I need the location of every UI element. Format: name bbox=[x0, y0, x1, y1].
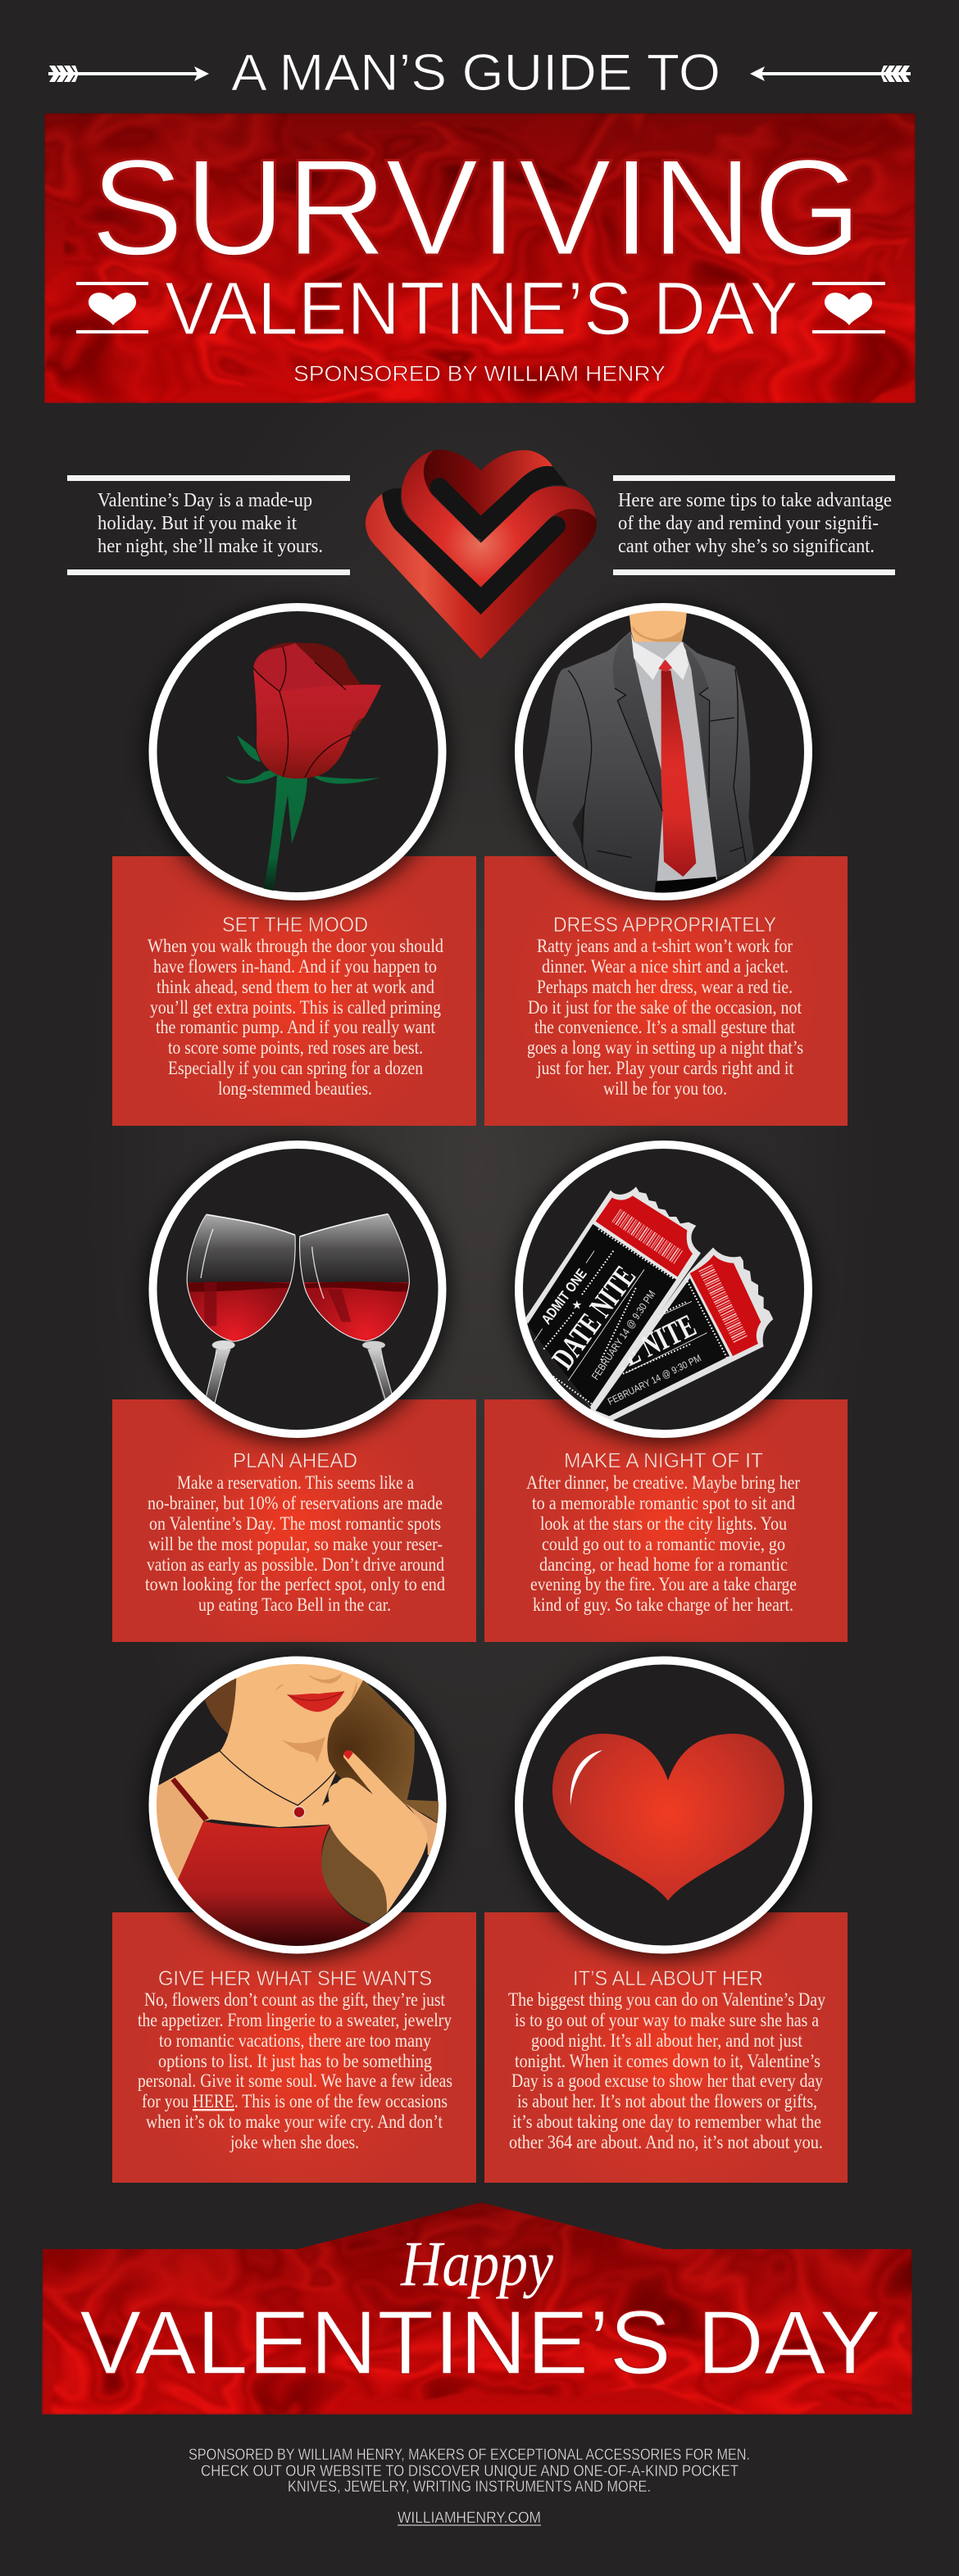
body text: make a night of it: dancing, or head home for a romantic bbox=[539, 1554, 788, 1576]
circle icon: wine glasses bbox=[147, 1141, 448, 1443]
body text: give her what she wants bbox=[138, 1989, 452, 2153]
body text: plan ahead: town looking for the perfect spot, only to end bbox=[145, 1574, 445, 1595]
body text: set the mood: to score some points, red roses are best. bbox=[168, 1037, 423, 1059]
body text: give her what she wants: options to list. It just has to be something bbox=[158, 2051, 432, 2072]
top banner bbox=[44, 113, 916, 403]
intro text: left: her night, she’ll make it yours. bbox=[98, 536, 323, 557]
body text: dress appropriately: Perhaps match her dress, wear a red tie. bbox=[537, 977, 793, 998]
ticket: front: ★ bbox=[571, 1299, 582, 1312]
body text: set the mood: When you walk through the door you should bbox=[148, 936, 443, 957]
body text: dress appropriately: Do it just for the sake of the occasion, not bbox=[528, 997, 802, 1018]
body text: give her what she wants: for you HERE. This is one of the few occasions bbox=[142, 2091, 448, 2112]
arrow: right bbox=[750, 66, 911, 82]
ticket: back bbox=[575, 1248, 773, 1422]
title: a man's guide to: A MAN’S GUIDE TO bbox=[231, 44, 720, 102]
footer text: KNIVES, JEWELRY, WRITING INSTRUMENTS AND MORE. bbox=[288, 2478, 651, 2496]
body text: dress appropriately: just for her. Play your cards right and it bbox=[536, 1058, 793, 1079]
intro text: left: Valentine’s Day is a made-up bbox=[98, 490, 312, 511]
row 3 panel: it's all about her bbox=[484, 1912, 848, 2183]
intro text: right: of the day and remind your signifi- bbox=[618, 513, 879, 534]
ticket: front bbox=[525, 1186, 701, 1411]
body text: it's all about her: is about her. It’s not about the flowers or gifts, bbox=[517, 2091, 817, 2112]
body text: make a night of it: could go out to a romantic movie, go bbox=[542, 1534, 785, 1555]
body text: dress appropriately: the convenience. It’s a small gesture that bbox=[534, 1017, 795, 1038]
heading: make a night of it: MAKE A NIGHT OF IT bbox=[564, 1449, 763, 1472]
ticket: front: FEBRUARY 14 @ 9:30 PM bbox=[589, 1288, 658, 1382]
body text: it's all about her: is to go out of your way to make sure she has a bbox=[515, 2010, 819, 2031]
footer text bbox=[189, 2447, 750, 2496]
ticket: back: FEBRUARY 14 @ 9:30 PM bbox=[606, 1352, 703, 1408]
body text: dress appropriately: Ratty jeans and a t-shirt won’t work for bbox=[537, 936, 793, 957]
row 1 panel: set the mood bbox=[112, 856, 476, 1126]
body text: it's all about her: good night. It’s all about her, and not just bbox=[531, 2030, 802, 2052]
body text: give her what she wants: joke when she does. bbox=[230, 2132, 359, 2153]
body text: set the mood: you’ll get extra points. This is called priming bbox=[150, 997, 441, 1018]
row 3 panel: give her what she wants bbox=[112, 1912, 476, 2183]
intro text: right: Here are some tips to take advantage bbox=[618, 490, 892, 511]
ticket: front: DATE NITE bbox=[546, 1260, 643, 1376]
body text: it's all about her: Day is a good excuse to show her that every day bbox=[511, 2070, 823, 2092]
body text: set the mood: long-stemmed beauties. bbox=[218, 1078, 372, 1100]
body text: plan ahead bbox=[145, 1472, 445, 1616]
row 1 panel: dress appropriately bbox=[484, 856, 848, 1126]
body text: plan ahead: on Valentine’s Day. The most romantic spots bbox=[149, 1513, 441, 1535]
body text: plan ahead: vation as early as possible. Don’t drive around bbox=[147, 1554, 444, 1576]
body text: set the mood bbox=[148, 936, 443, 1100]
body text: it's all about her: tonight. When it comes down to it, Valentine’s bbox=[515, 2051, 820, 2072]
body text: give her what she wants: to romantic vacations, there are too many bbox=[159, 2030, 431, 2052]
circle icon: man in suit bbox=[513, 604, 815, 905]
body text: set the mood: think ahead, send them to her at work and bbox=[157, 977, 434, 998]
row 2 panel: make a night of it bbox=[484, 1399, 848, 1642]
body text: it's all about her: it’s about taking one day to remember what the bbox=[512, 2111, 821, 2133]
ticket: front: ADMIT ONE bbox=[538, 1266, 590, 1327]
heading: dress appropriately: DRESS APPROPRIATELY bbox=[553, 914, 776, 937]
bottom banner bbox=[42, 2202, 912, 2415]
body text: set the mood: Especially if you can spring for a dozen bbox=[168, 1058, 423, 1079]
row 2 panel: plan ahead bbox=[112, 1399, 476, 1642]
body text: it's all about her: The biggest thing you can do on Valentine’s Day bbox=[508, 1989, 825, 2011]
body text: set the mood: the romantic pump. And if you really want bbox=[156, 1017, 435, 1038]
footer text: CHECK OUT OUR WEBSITE TO DISCOVER UNIQUE AND ONE-OF-A-KIND POCKET bbox=[201, 2463, 739, 2480]
body text: give her what she wants: the appetizer. From lingerie to a sweater, jewelry bbox=[138, 2010, 452, 2031]
body text: make a night of it: After dinner, be creative. Maybe bring her bbox=[526, 1472, 800, 1494]
heading: set the mood: SET THE MOOD bbox=[222, 914, 368, 937]
body text: give her what she wants: No, flowers don’t count as the gift, they’re just bbox=[144, 1989, 445, 2011]
ticket: back: DATE NITE bbox=[575, 1307, 702, 1394]
body text: plan ahead: no-brainer, but 10% of reservations are made bbox=[148, 1493, 443, 1514]
body text: dress appropriately: dinner. Wear a nice shirt and a jacket. bbox=[542, 956, 789, 977]
circle icon: woman with necklace bbox=[147, 1658, 448, 1959]
heading: valentine's day: VALENTINE’S DAY bbox=[165, 267, 798, 351]
icon: woven ribbon heart bbox=[366, 450, 597, 659]
heart ornament: left bbox=[76, 282, 148, 333]
body text: plan ahead: up eating Taco Bell in the car. bbox=[198, 1594, 391, 1616]
body text: give her what she wants: when it’s ok to make your wife cry. And don’t bbox=[146, 2111, 443, 2133]
intro text: right bbox=[613, 475, 895, 575]
intro text: left bbox=[67, 475, 350, 575]
body text: dress appropriately bbox=[527, 936, 803, 1100]
intro text: left: holiday. But if you make it bbox=[98, 513, 297, 534]
heading: valentine's day: VALENTINE’S DAY bbox=[80, 2293, 881, 2393]
body text: make a night of it: look at the stars or the city lights. You bbox=[540, 1513, 787, 1535]
circle icon: date night tickets bbox=[513, 1141, 815, 1443]
heading: it's all about her: IT’S ALL ABOUT HER bbox=[573, 1967, 763, 1990]
body text: make a night of it: evening by the fire. You are a take charge bbox=[530, 1574, 797, 1595]
sponsor line: SPONSORED BY WILLIAM HENRY bbox=[293, 361, 666, 386]
body text: make a night of it bbox=[526, 1472, 800, 1616]
intro text: right: cant other why she’s so significant. bbox=[618, 536, 875, 557]
circle icon: glossy heart bbox=[513, 1658, 815, 1959]
body text: it's all about her: other 364 are about. And no, it’s not about you. bbox=[509, 2132, 823, 2153]
footer link: WILLIAMHENRY.COM bbox=[398, 2510, 541, 2527]
footer text: SPONSORED BY WILLIAM HENRY, MAKERS OF EXCEPTIONAL ACCESSORIES FOR MEN. bbox=[189, 2447, 750, 2464]
heading: happy: Happy bbox=[400, 2228, 553, 2299]
body text: dress appropriately: goes a long way in setting up a night that’s bbox=[527, 1037, 803, 1059]
body text: plan ahead: will be the most popular, so make your reser- bbox=[148, 1534, 443, 1555]
arrow: left bbox=[48, 66, 209, 82]
body text: give her what she wants: personal. Give it some soul. We have a few ideas bbox=[138, 2070, 452, 2092]
body text: make a night of it: to a memorable romantic spot to sit and bbox=[532, 1493, 795, 1514]
circle icon: rose bbox=[147, 604, 448, 905]
body text: make a night of it: kind of guy. So take charge of her heart. bbox=[533, 1594, 793, 1616]
heart ornament: right bbox=[812, 282, 885, 333]
heading: surviving: SURVIVING bbox=[90, 130, 862, 284]
body text: it's all about her bbox=[508, 1989, 825, 2153]
body text: plan ahead: Make a reservation. This seems like a bbox=[177, 1472, 414, 1494]
heading: give her what she wants: GIVE HER WHAT SHE WANTS bbox=[158, 1967, 432, 1990]
heading: plan ahead: PLAN AHEAD bbox=[233, 1449, 357, 1472]
body text: set the mood: have flowers in-hand. And if you happen to bbox=[153, 956, 437, 977]
body text: dress appropriately: will be for you too. bbox=[603, 1078, 727, 1100]
